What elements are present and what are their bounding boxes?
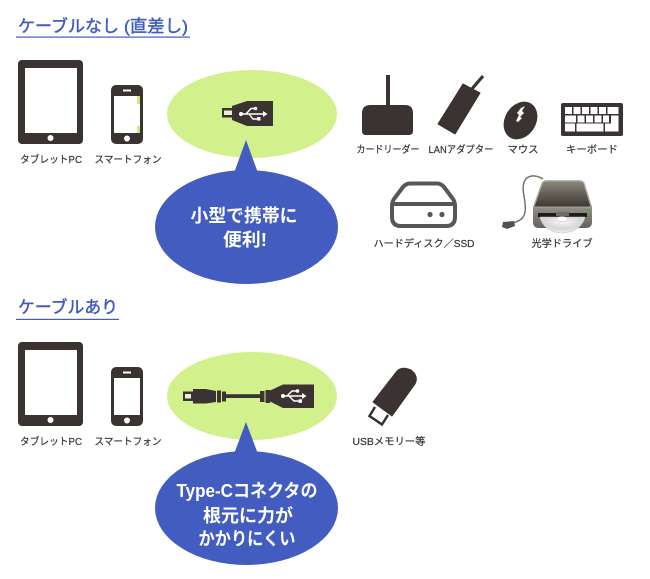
icon: USB connector [222,101,273,126]
label: keyboard: キーボード [566,144,618,156]
icon: LAN adapter [438,76,483,134]
callout: less strain on the Type-C connector: Type-Cコネクタの [176,481,318,501]
heading: without cable: ケーブルなし [18,16,119,36]
icon: USB cable [183,384,314,408]
callout: small and portable: 小型で携帯に [190,206,298,226]
icon: USB memory stick [370,368,416,424]
green ellipse with cable [167,352,337,440]
callout: small and portable [155,140,338,284]
icon: card reader [362,75,413,135]
label: optical drive: 光学ドライブ [532,237,592,250]
heading: without cable [16,16,190,38]
green ellipse with USB connector [167,70,337,158]
label: tablet PC: タブレットPC [20,435,82,448]
callout: less strain on the Type-C connector [155,422,338,565]
label: smartphone: スマートフォン [94,155,162,166]
callout: less strain on the Type-C connector: かかりにくい [198,529,296,549]
icon: mouse [497,95,544,146]
icon: smartphone [111,85,143,144]
label: USB memory etc.: USBメモリー等 [352,435,426,448]
icon: hard disk [392,184,455,226]
icon: tablet [18,60,83,144]
label: tablet PC: タブレットPC [20,153,82,166]
icon: smartphone [111,367,143,426]
icon: keyboard [561,103,623,136]
label: card reader: カードリーダー [356,143,420,156]
label: hard disk / SSD: ハードディスク／SSD [374,237,474,250]
icon: tablet [18,342,83,426]
callout: small and portable: 便利! [223,230,267,250]
label: smartphone: スマートフォン [94,437,162,448]
icon: optical drive [502,176,592,233]
heading: with cable: ケーブルあり [18,297,118,317]
callout: less strain on the Type-C connector: 根元に力が [203,505,293,526]
label: mouse: マウス [508,144,538,156]
heading: without cable: (直差し) [124,17,188,36]
label: LAN adapter: LANアダプター [428,143,494,156]
